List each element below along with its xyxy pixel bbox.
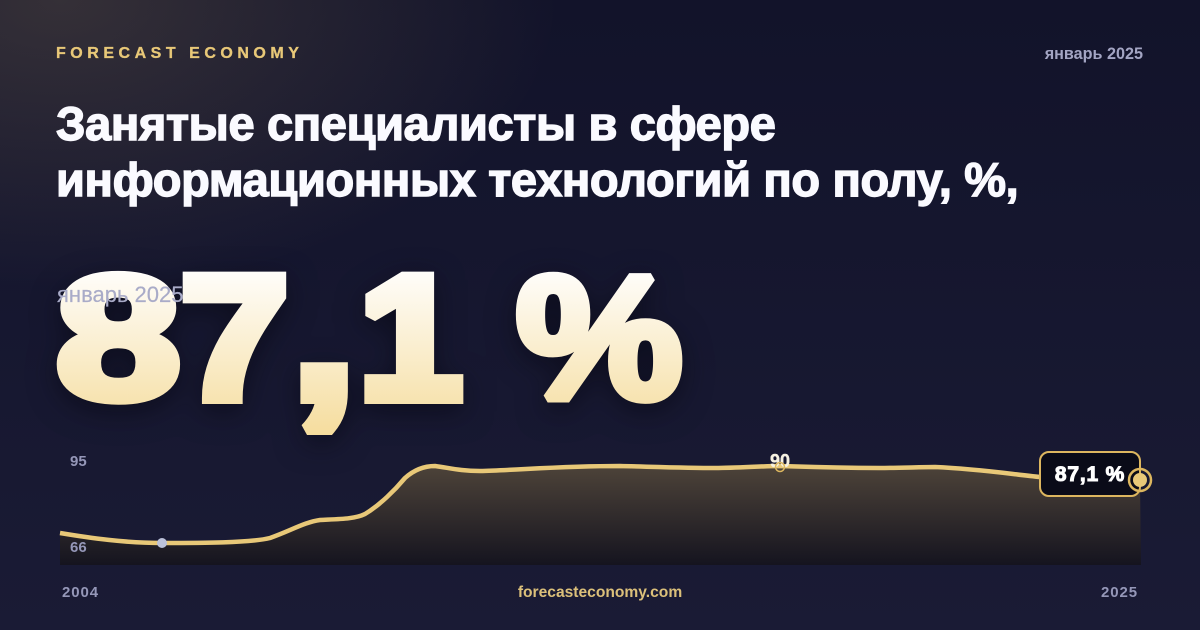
big value: , [291, 218, 357, 441]
big value: 1 [359, 241, 462, 436]
title [56, 97, 1018, 207]
brand label: FORECAST ECONOMY [56, 45, 303, 62]
date top right: январь 2025 [1045, 45, 1143, 63]
axis labels [62, 453, 1138, 601]
line [60, 466, 1040, 543]
title: Занятые специалисты в сфере [56, 97, 776, 150]
title: информационных технологий по полу, %, [56, 153, 1018, 206]
axis labels: 2025 [1101, 584, 1138, 601]
end marker [1129, 469, 1151, 491]
max marker: 90 [770, 451, 790, 471]
footer site: forecasteconomy.com [518, 584, 682, 601]
big value: 8 [56, 240, 181, 435]
value callout [1040, 452, 1140, 496]
date overlapping value: январь 2025 [57, 282, 184, 307]
axis labels: 66 [70, 539, 87, 556]
value callout: 87,1 % [1055, 463, 1125, 486]
axis labels: 95 [70, 453, 87, 470]
big value: 7 [181, 239, 288, 435]
min marker [157, 538, 167, 548]
big value: % [516, 241, 682, 436]
axis labels: 2004 [62, 584, 99, 601]
area fill [60, 466, 1141, 565]
